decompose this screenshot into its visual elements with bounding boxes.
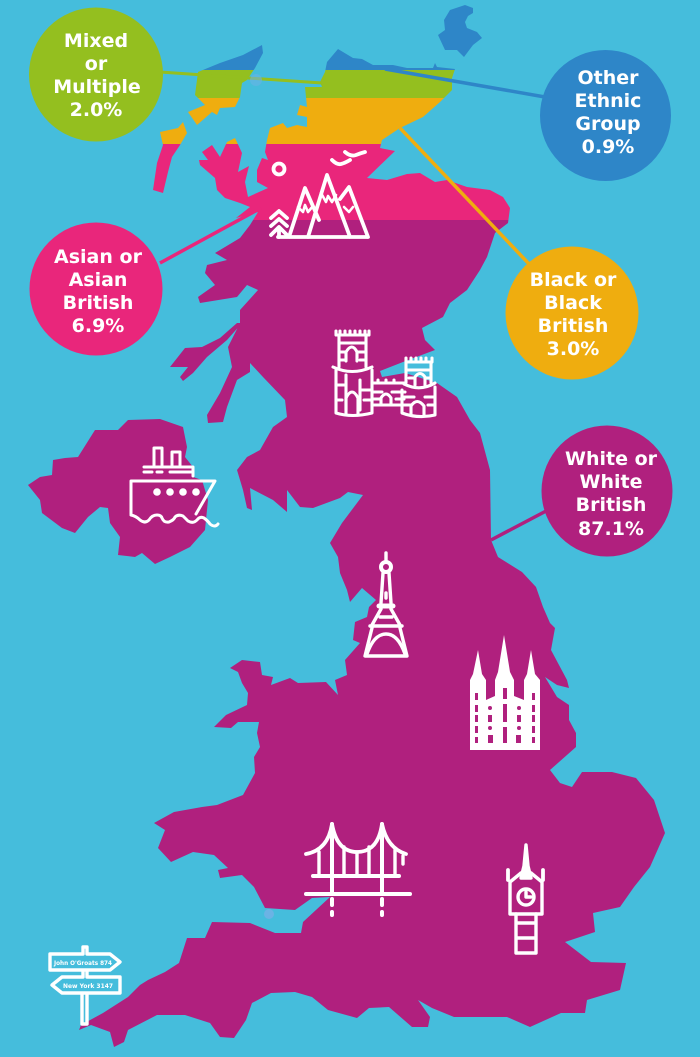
icon: clock tower (508, 845, 543, 953)
icon: suspension bridge (306, 824, 410, 915)
connector: mixed or multiple (160, 72, 322, 83)
callout: black or black british (506, 246, 638, 380)
callout: black or black british: Black or (530, 269, 617, 291)
connector: white or white british (491, 510, 548, 540)
callout: white or white british (542, 426, 672, 556)
callout: mixed or multiple: or (85, 53, 108, 75)
connector: black or black british (400, 128, 530, 265)
callout: white or white british: 87.1% (578, 518, 644, 540)
connector: other ethnic group (385, 69, 545, 97)
callout: asian or asian british (30, 222, 162, 356)
icon: signpost: John O'Groats 874 (53, 959, 112, 967)
callout: mixed or multiple: Mixed (64, 30, 128, 52)
callout: mixed or multiple: Multiple (53, 76, 141, 98)
callout: asian or asian british: Asian or (54, 246, 143, 268)
callout: other ethnic group: Ethnic (575, 90, 641, 112)
callout: black or black british: 3.0% (547, 338, 599, 360)
callout: white or white british: White or (565, 448, 658, 470)
callout: other ethnic group: Other (577, 67, 639, 89)
callout: asian or asian british: British (63, 292, 133, 314)
connector: asian or asian british (160, 208, 261, 263)
icon: ferry ship (131, 448, 218, 526)
icon: tower (365, 553, 407, 656)
callout: other ethnic group (540, 50, 671, 181)
highlight marks (250, 74, 274, 919)
callout: black or black british: British (538, 315, 608, 337)
callout: other ethnic group: Group (575, 113, 641, 135)
callout: asian or asian british: 6.9% (72, 315, 124, 337)
icon: signpost (50, 947, 120, 1024)
icon: cathedral (470, 635, 540, 750)
callout: mixed or multiple (29, 8, 163, 142)
callout: black or black british: Black (544, 292, 602, 314)
callout: white or white british: White (580, 471, 642, 493)
callout: white or white british: British (576, 494, 646, 516)
icon: castle (333, 331, 435, 417)
callout: other ethnic group: 0.9% (582, 136, 634, 158)
callout: mixed or multiple: 2.0% (70, 99, 122, 121)
icon: mountains with sun, birds and trees (271, 152, 368, 237)
callout: asian or asian british: Asian (69, 269, 127, 291)
icon: signpost: New York 3147 (63, 982, 113, 990)
